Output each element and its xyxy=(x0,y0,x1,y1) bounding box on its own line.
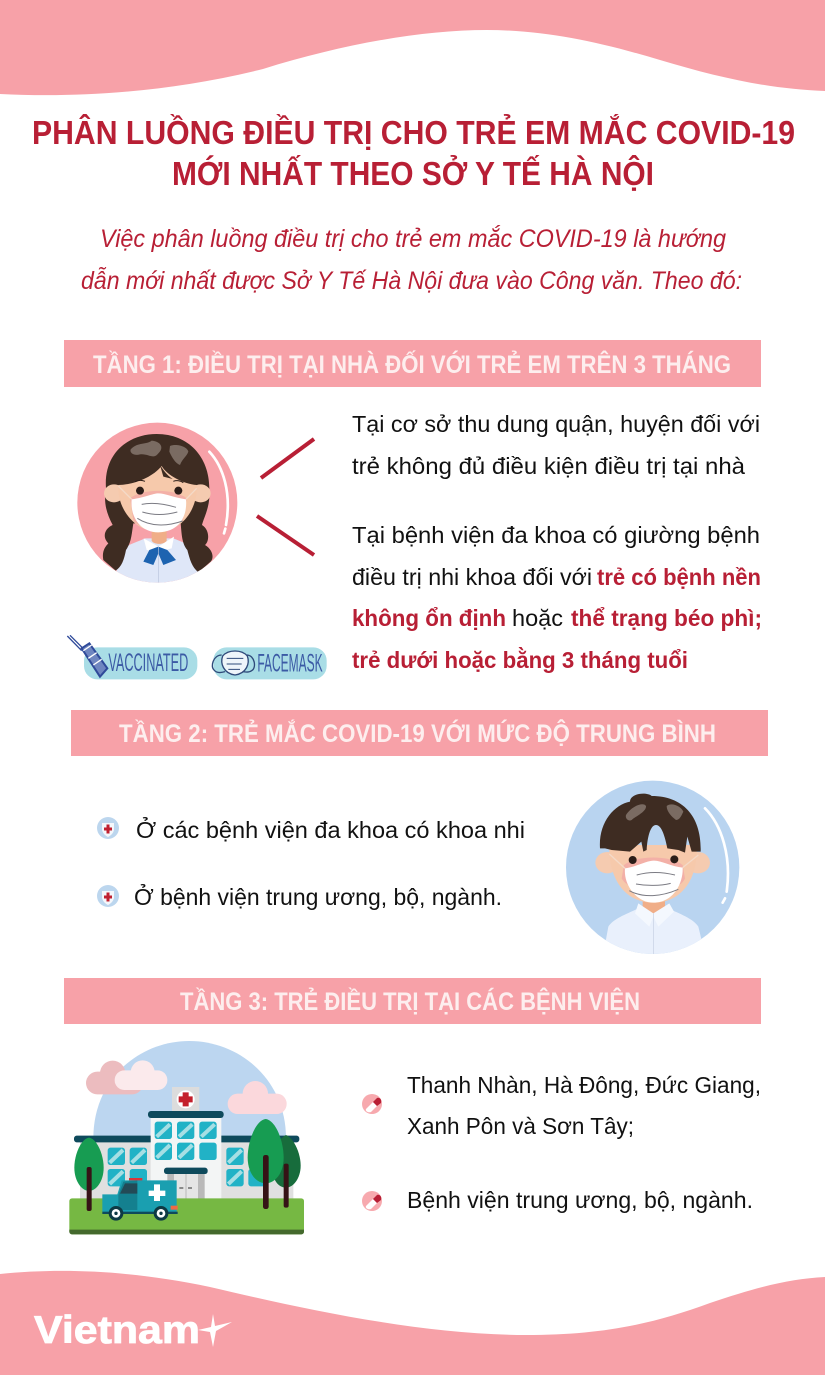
text block: tier 1 locations: hoặc xyxy=(512,605,563,631)
intro text: Việc phân luồng điều trị cho trẻ em mắc COVID-19 là hướng xyxy=(100,224,726,253)
heading: tier 3 banner xyxy=(64,978,761,1024)
icon: pill bullet 2 xyxy=(362,1191,382,1211)
illustration: boy wearing mask xyxy=(566,781,739,954)
heading: tier 1 banner xyxy=(64,340,761,387)
badge: facemask xyxy=(212,647,327,679)
panel: tier 1 xyxy=(64,340,762,679)
badge: vaccinated: VACCINATED xyxy=(108,650,188,677)
illustration: hospital with ambulance xyxy=(69,1041,304,1234)
heading: tier 1 banner: TẦNG 1: ĐIỀU TRỊ TẠI NHÀ ĐỐI VỚI TRẺ EM TRÊN 3 THÁNG xyxy=(93,349,731,379)
top wave header xyxy=(0,0,825,95)
trees right xyxy=(272,1135,301,1188)
badge: facemask: FACEMASK xyxy=(257,651,323,678)
tree left xyxy=(74,1138,104,1191)
text block: tier 1 locations: trẻ có bệnh nền xyxy=(597,564,761,590)
cloud white xyxy=(115,1060,167,1090)
heading: tier 2 banner xyxy=(71,710,768,756)
ambulance xyxy=(102,1178,178,1221)
text: central hospitals: Bệnh viện trung ương, bộ, ngành. xyxy=(407,1187,753,1213)
text: hospital list: Thanh Nhàn, Hà Đông, Đức Giang, xyxy=(407,1072,761,1098)
logo: Vietnam+: Vietnam xyxy=(34,1309,200,1352)
intro text: dẫn mới nhất được Sở Y Tế Hà Nội đưa vào Công văn. Theo đó: xyxy=(81,266,742,295)
text block: tier 1 locations: điều trị nhi khoa đối với xyxy=(352,564,592,590)
title xyxy=(32,114,795,192)
title: MỚI NHẤT THEO SỞ Y TẾ HÀ NỘI xyxy=(172,154,654,192)
bottom wave footer xyxy=(0,1271,825,1375)
text: general hospitals: Ở các bệnh viện đa khoa có khoa nhi xyxy=(136,815,525,843)
text: central hospitals: Ở bệnh viện trung ương, bộ, ngành. xyxy=(134,882,502,910)
text block: tier 1 locations xyxy=(352,411,762,673)
text block: tier 1 locations: thể trạng béo phì; xyxy=(571,605,762,631)
text: hospital list: Xanh Pôn và Sơn Tây; xyxy=(407,1113,634,1139)
text block: tier 1 locations: trẻ không đủ điều kiện điều trị tại nhà xyxy=(352,453,745,479)
text: hospital list xyxy=(407,1072,761,1139)
illustration: girl wearing mask xyxy=(77,423,237,583)
text block: tier 1 locations: trẻ dưới hoặc bằng 3 tháng tuổi xyxy=(352,646,688,673)
bracket lines xyxy=(257,439,314,555)
panel: tier 2 xyxy=(71,710,768,954)
badge: vaccinated xyxy=(67,635,197,679)
cloud right xyxy=(228,1081,287,1114)
heading: tier 3 banner: TẦNG 3: TRẺ ĐIỀU TRỊ TẠI CÁC BỆNH VIỆN xyxy=(180,986,640,1016)
text block: tier 1 locations: Tại cơ sở thu dung quận, huyện đối với xyxy=(352,411,760,437)
intro text xyxy=(81,224,742,295)
heading: tier 2 banner: TẦNG 2: TRẺ MẮC COVID-19 VỚI MỨC ĐỘ TRUNG BÌNH xyxy=(119,718,716,748)
text block: tier 1 locations: không ổn định xyxy=(352,605,506,631)
icon: pill bullet 1 xyxy=(362,1094,382,1114)
cloud left xyxy=(86,1061,143,1094)
icon: medical bullet 1 xyxy=(97,817,119,839)
panel: tier 3 xyxy=(64,978,761,1234)
text block: tier 1 locations: Tại bệnh viện đa khoa có giường bệnh xyxy=(352,522,760,548)
icon: medical bullet 2 xyxy=(97,885,119,907)
